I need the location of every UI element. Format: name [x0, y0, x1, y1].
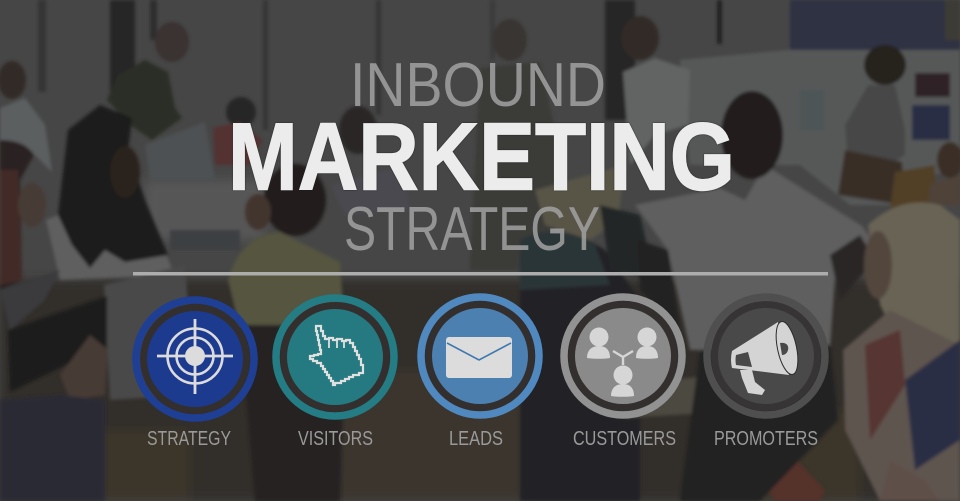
leads badge — [421, 297, 539, 415]
promoters badge — [707, 297, 825, 415]
wall columns — [110, 0, 135, 92]
icon: pixel hand cursor — [310, 326, 363, 385]
back wall: blue, bookshelves — [790, 0, 960, 62]
title — [228, 51, 735, 264]
step: leads — [421, 297, 539, 450]
divider rule under title — [133, 272, 828, 276]
far left woman — [0, 140, 34, 290]
man in t-shirt — [621, 16, 659, 60]
blonde woman centre — [535, 165, 625, 240]
woman with bob haircut — [264, 164, 326, 236]
strategy badge — [136, 300, 254, 418]
man at left — [0, 61, 26, 99]
red shirt person — [226, 97, 256, 127]
step: strategy — [136, 300, 254, 450]
man's papers and red stripe — [610, 375, 725, 418]
man standing, top left — [155, 22, 189, 62]
couch and far right person — [890, 165, 935, 210]
icon: target crosshair — [157, 319, 233, 394]
title line: Inbound: INBOUND — [350, 51, 606, 120]
visitors badge — [276, 298, 394, 416]
title line: Marketing: MARKETING — [228, 104, 735, 210]
woman with long black hair — [46, 210, 175, 280]
person with short dark hair — [339, 106, 377, 154]
label: strategy: STRATEGY — [147, 428, 231, 450]
man in white shirt — [635, 165, 876, 350]
title line: Strategy: STRATEGY — [344, 195, 600, 264]
tablet and woman's hand, left — [104, 265, 195, 400]
dark trousers, centre-left — [240, 325, 345, 501]
woman in grey with bag — [864, 45, 906, 85]
laptop on table — [145, 122, 215, 180]
label: leads: LEADS — [449, 428, 503, 450]
customers badge — [564, 297, 682, 415]
step: visitors — [276, 298, 394, 450]
icon: connected people — [587, 328, 658, 397]
label: visitors: VISITORS — [298, 428, 373, 450]
label: promoters: PROMOTERS — [714, 428, 818, 450]
icon: megaphone — [731, 320, 802, 395]
label: customers: CUSTOMERS — [573, 428, 676, 450]
man reading, back centre — [493, 19, 527, 61]
step: customers — [564, 297, 682, 450]
step: promoters — [707, 297, 825, 450]
icon: envelope — [446, 337, 512, 378]
woman right: hair and sweater — [868, 202, 960, 360]
